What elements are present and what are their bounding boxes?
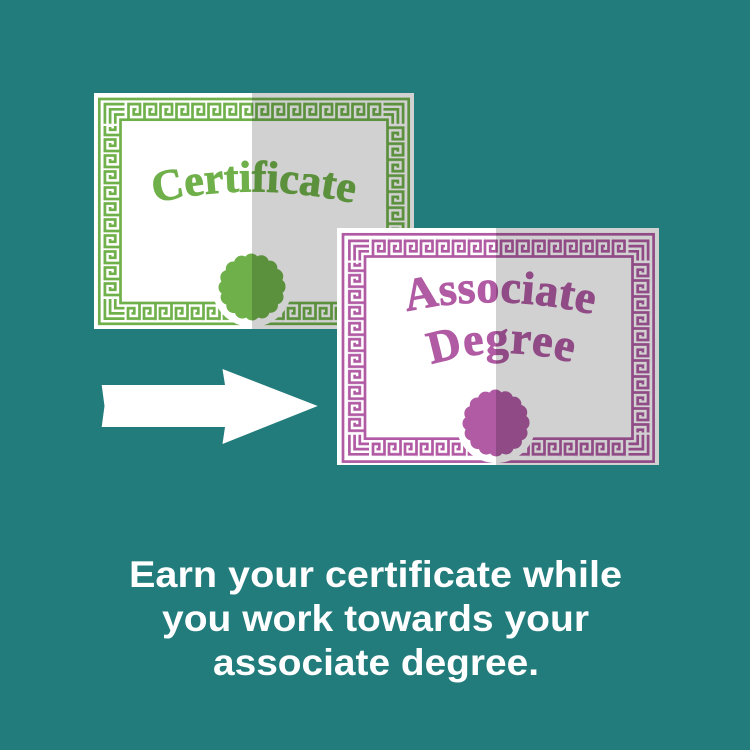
caption line 3: associate degree.	[213, 642, 539, 683]
greek key border	[99, 99, 409, 324]
caption line 2: you work towards your	[162, 598, 589, 639]
caption	[129, 554, 622, 683]
arrow	[102, 369, 318, 444]
caption line 1: Earn your certificate while	[129, 554, 622, 595]
seal: green	[214, 254, 290, 326]
paper	[337, 228, 659, 465]
seal: purple	[458, 390, 534, 463]
certificate: green	[94, 93, 414, 329]
title: Certificate: Certificate	[153, 160, 356, 202]
fold shadow	[496, 228, 659, 465]
fold shadow	[252, 93, 414, 329]
paper	[94, 93, 414, 329]
title: Associate: Associate	[406, 271, 595, 314]
certificate: purple	[337, 228, 659, 465]
greek key border	[343, 234, 654, 462]
title: Degree: Degree	[424, 328, 574, 364]
